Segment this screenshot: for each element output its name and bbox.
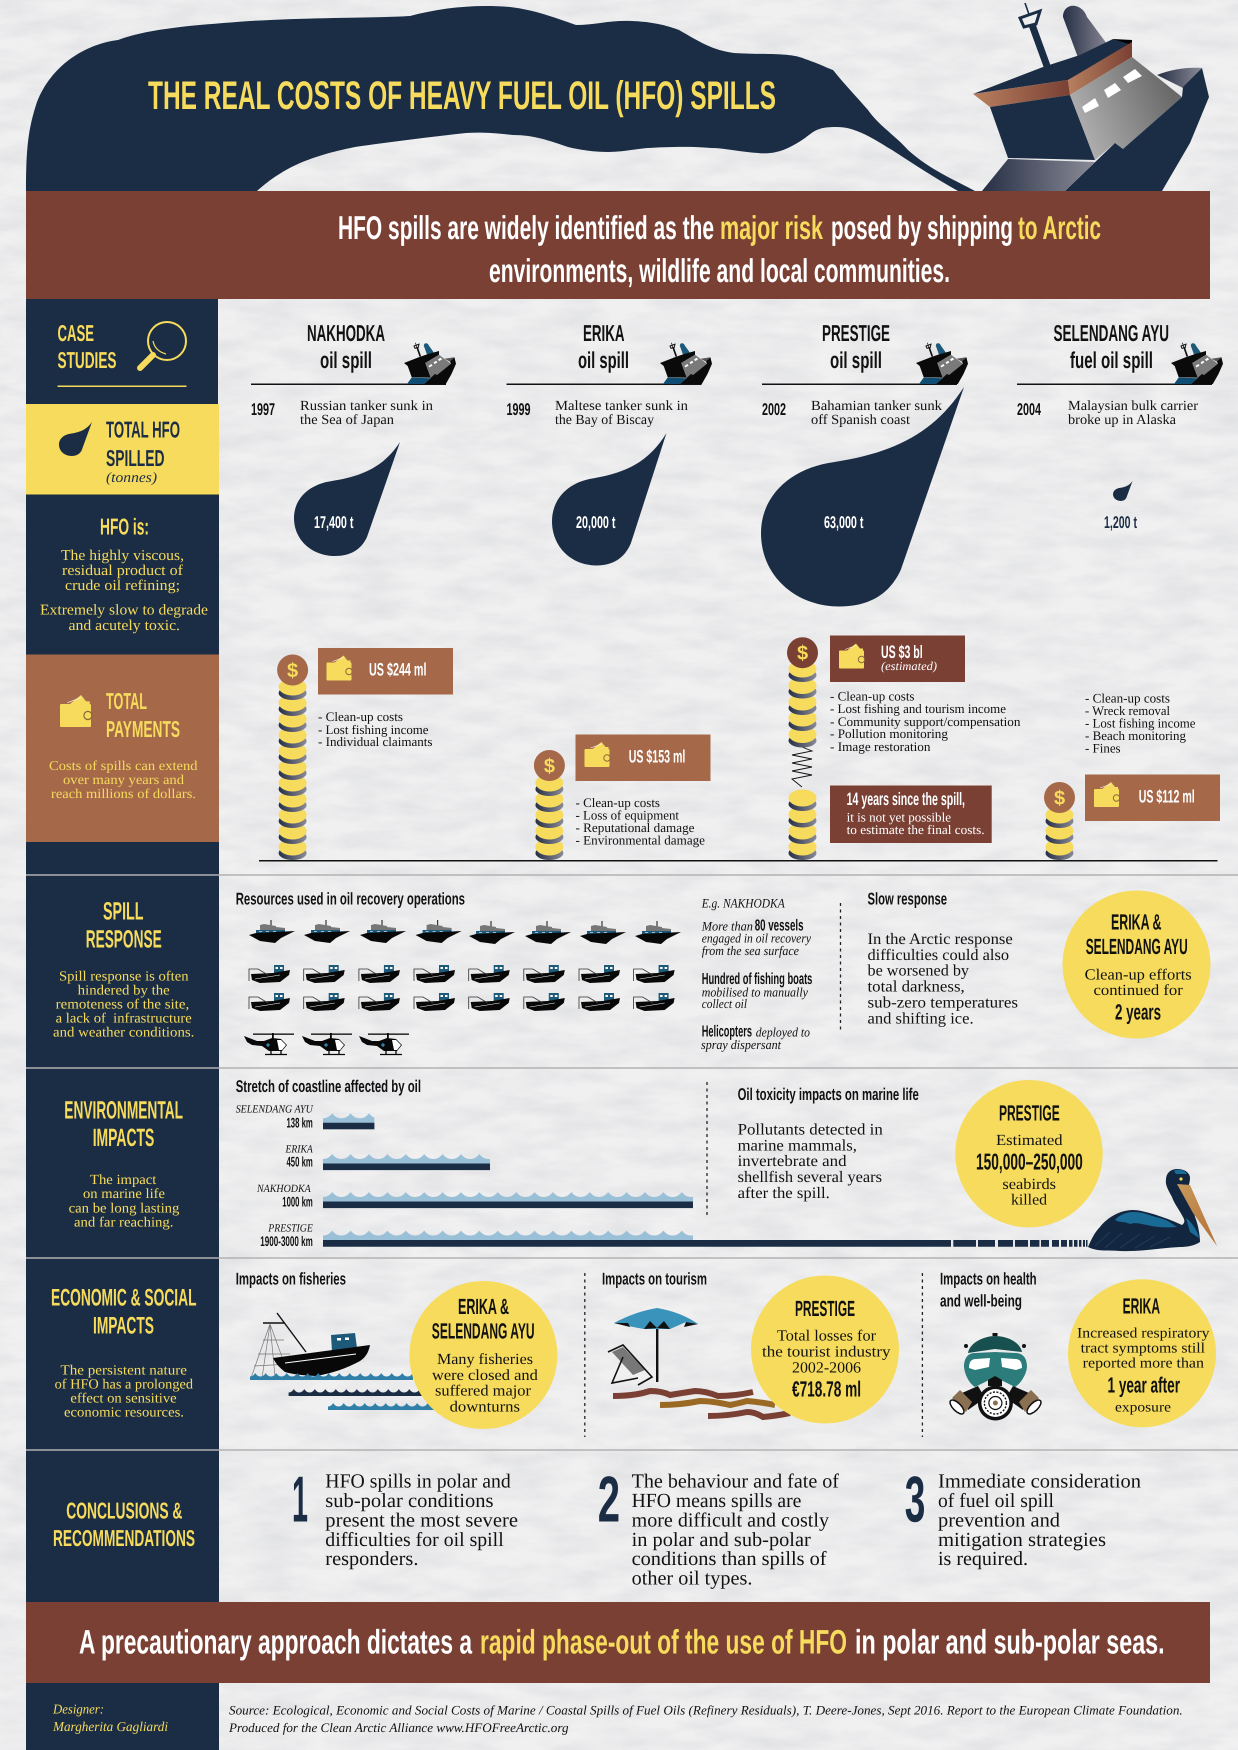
row: Nakhodka: 1000 km xyxy=(282,1193,313,1209)
note: on marine life xyxy=(83,1187,165,1202)
note: Costs of spills can extend xyxy=(49,758,198,773)
coin stack: Erika: $ xyxy=(544,756,555,778)
note: The persistent nature xyxy=(60,1363,187,1378)
icon: wallet xyxy=(326,656,352,680)
cost list: - Clean-up costs xyxy=(318,709,403,724)
description: Maltese tanker sunk in xyxy=(555,399,688,414)
conclusion 2: 2 xyxy=(598,1463,620,1536)
heading: CASE xyxy=(58,320,94,346)
callout: fisheries: Many fisheries xyxy=(437,1351,533,1368)
callout: Prestige seabirds xyxy=(955,1080,1103,1227)
name: PRESTIGE xyxy=(822,320,890,346)
callout: health: reported more than xyxy=(1083,1356,1205,1372)
callout: health: 1 year after xyxy=(1108,1373,1180,1398)
conclusion 2: HFO means spills are xyxy=(632,1490,802,1512)
waves: oil on beach xyxy=(613,1391,790,1417)
text: oil toxicity: Pollutants detected in xyxy=(738,1121,883,1138)
section: economic and social impacts sidebar xyxy=(26,1258,219,1450)
icon: magnifier xyxy=(140,322,186,368)
icon: wallet xyxy=(839,644,865,668)
note: reach millions of dollars. xyxy=(51,786,196,801)
note: and weather conditions. xyxy=(53,1026,194,1041)
headline text: posed by shipping xyxy=(831,209,1013,246)
section: spill response sidebar xyxy=(26,875,219,1068)
amount: US $153 ml xyxy=(629,746,685,766)
year: 2004 xyxy=(1017,400,1041,419)
headline band xyxy=(26,191,1210,299)
value: 1,200 t xyxy=(1104,513,1137,532)
conclusion 1: responders. xyxy=(325,1548,418,1570)
cost list: - Clean-up costs xyxy=(576,795,660,810)
icon: wallet xyxy=(60,695,92,727)
sidebar: spacer xyxy=(26,842,219,875)
heading xyxy=(53,1497,195,1551)
name xyxy=(1054,320,1169,373)
sidebar: total HFO spilled xyxy=(26,404,219,494)
note xyxy=(69,1173,179,1230)
label: (tonnes) xyxy=(106,470,157,486)
name xyxy=(307,320,385,373)
icon: ship xyxy=(1171,343,1223,384)
note: a lack of infrastructure xyxy=(56,1012,192,1027)
heading: ECONOMIC & SOCIAL xyxy=(51,1285,196,1312)
heading: SPILL xyxy=(103,897,144,925)
row: Nakhodka: NAKHODKA xyxy=(256,1183,311,1195)
callout: Prestige seabirds: 150,000–250,000 xyxy=(976,1148,1083,1174)
text: Nakhodka resources: spray dispersant xyxy=(701,1037,781,1052)
coin stack: Prestige xyxy=(787,637,818,860)
callout: fisheries: were closed and xyxy=(432,1367,538,1384)
column: Nakhodka xyxy=(251,320,456,556)
section: conclusions sidebar xyxy=(26,1450,219,1603)
callout: tourism xyxy=(751,1276,899,1424)
callout: tourism: €718.78 ml xyxy=(792,1377,861,1402)
row: Erika xyxy=(285,1144,490,1170)
description: the Bay of Biscay xyxy=(555,413,654,428)
coin stack: Nakhodka xyxy=(277,654,308,860)
row: Nakhodka xyxy=(256,1183,693,1209)
column: Prestige xyxy=(761,320,968,606)
conclusion 2: conditions than spills of xyxy=(632,1548,827,1570)
cost list: - Wreck removal xyxy=(1085,703,1170,718)
year: 1997 xyxy=(251,400,275,419)
cost list: - Individual claimants xyxy=(318,734,432,749)
conclusion 1: sub-polar conditions xyxy=(325,1490,494,1512)
heading: PAYMENTS xyxy=(106,716,180,742)
note: over many years and xyxy=(63,772,184,787)
heading xyxy=(106,688,180,742)
heading: CONCLUSIONS & xyxy=(66,1497,182,1523)
text: Nakhodka resources xyxy=(701,896,812,1052)
label: TOTAL HFO xyxy=(106,416,180,442)
chart heading: Stretch of coastline affected by oil xyxy=(236,1077,421,1096)
conclusion 1: 1 xyxy=(292,1463,308,1536)
name xyxy=(822,320,890,373)
designer credit xyxy=(26,1683,219,1750)
drop: 20,000 t xyxy=(552,433,666,565)
conclusion 1: HFO spills in polar and xyxy=(325,1471,511,1493)
icon: ship xyxy=(916,343,968,384)
conclusion 3: Immediate consideration xyxy=(938,1471,1141,1493)
designer credit: Margherita Gagliardi xyxy=(52,1719,168,1734)
name: NAKHODKA xyxy=(307,320,385,346)
cost list: - Lost fishing and tourism income xyxy=(830,701,1006,716)
text: slow response: and shifting ice. xyxy=(868,1010,974,1027)
cost list: - Fines xyxy=(1085,741,1121,756)
text: slow response: sub-zero temperatures xyxy=(868,994,1018,1011)
source note: Produced for the Clean Arctic Alliance www.HFOFreeArctic.org xyxy=(228,1720,569,1735)
callout: fisheries: SELENDANG AYU xyxy=(432,1318,535,1343)
value: 20,000 t xyxy=(576,513,616,532)
estimated note: (estimated) xyxy=(881,659,937,673)
note: can be long lasting xyxy=(69,1201,179,1216)
icon: sinking ship xyxy=(973,3,1209,191)
note: of HFO has a prolonged xyxy=(55,1378,193,1393)
definition: residual product of xyxy=(62,563,183,579)
conclusion 3: of fuel oil spill xyxy=(938,1490,1054,1512)
cost list: - Image restoration xyxy=(830,739,931,754)
icon: wallet xyxy=(584,742,610,767)
name xyxy=(578,320,629,373)
name: oil spill xyxy=(830,347,882,373)
heading: STUDIES xyxy=(58,347,116,373)
source note: Source: Ecological, Economic and Social Costs of Marine / Coastal Spills of Fuel Oils (Refinery Residuals), T. Deere-Jones, Sept 2016. Report to the European Climate Foundation. xyxy=(229,1702,1183,1717)
callout: health: ERIKA xyxy=(1123,1293,1160,1318)
conclusion 2 xyxy=(598,1463,839,1589)
column: Selendang Ayu xyxy=(1017,320,1223,532)
heading: tourism: Impacts on tourism xyxy=(602,1270,707,1289)
headline text: major risk xyxy=(720,209,823,246)
heading: TOTAL xyxy=(106,688,147,714)
callout: Erika and Selendang Ayu clean-up: Clean-up efforts xyxy=(1085,966,1192,983)
closing statement: A precautionary approach dictates a xyxy=(79,1623,473,1661)
conclusion 3: mitigation strategies xyxy=(938,1529,1106,1551)
icon rows: fishing boats xyxy=(249,965,675,1011)
text: slow response: In the Arctic response xyxy=(868,931,1013,948)
sidebar: case studies xyxy=(26,299,218,404)
conclusion 1: present the most severe xyxy=(325,1510,518,1532)
cost list: - Lost fishing income xyxy=(318,722,429,737)
name: oil spill xyxy=(320,347,372,373)
definition: Extremely slow to degrade xyxy=(40,602,208,618)
closing statement: rapid phase-out of the use of HFO xyxy=(480,1623,847,1661)
heading xyxy=(51,1285,196,1339)
description xyxy=(1068,399,1198,428)
amount: US $112 ml xyxy=(1139,786,1195,806)
conclusion 2: The behaviour and fate of xyxy=(632,1471,839,1493)
callout: health: tract symptoms still xyxy=(1081,1341,1205,1357)
note: The impact xyxy=(90,1173,157,1188)
sidebar: total payments xyxy=(26,654,219,842)
note: economic resources. xyxy=(64,1406,184,1421)
callout: tourism: the tourist industry xyxy=(762,1344,891,1361)
label xyxy=(106,416,180,486)
cost list: - Lost fishing income xyxy=(1085,716,1196,731)
description xyxy=(300,399,433,428)
heading: RECOMMENDATIONS xyxy=(53,1525,195,1551)
payment: Nakhodka xyxy=(318,648,453,749)
text: oil toxicity: after the spill. xyxy=(738,1185,830,1202)
callout: Prestige seabirds: seabirds xyxy=(1002,1176,1056,1193)
sidebar: HFO is xyxy=(26,494,219,654)
amount: US $3 bl xyxy=(881,642,923,662)
heading: RESPONSE xyxy=(86,926,162,954)
payment: Selendang Ayu xyxy=(1085,690,1220,821)
text: Nakhodka resources: mobilised to manually xyxy=(702,985,808,1000)
conclusion 1: difficulties for oil spill xyxy=(325,1529,504,1551)
value: 17,400 t xyxy=(314,513,354,532)
cost list: - Clean-up costs xyxy=(830,689,914,704)
name: oil spill xyxy=(578,347,629,373)
note xyxy=(53,969,194,1041)
cost list xyxy=(1085,690,1196,756)
title: THE REAL COSTS OF HEAVY FUEL OIL (HFO) SPILLS xyxy=(148,74,776,118)
column: Erika xyxy=(506,320,712,565)
oil slick banner shape xyxy=(26,6,975,191)
row: Prestige: 1900-3000 km xyxy=(260,1233,313,1249)
cost list: - Clean-up costs xyxy=(1085,690,1170,706)
conclusion 3 xyxy=(905,1463,1141,1570)
heading: ENVIRONMENTAL xyxy=(64,1096,183,1124)
payments baseline xyxy=(259,860,1218,862)
callout: 14 years since the spill: to estimate the final costs. xyxy=(847,822,985,837)
row: Prestige: PRESTIGE xyxy=(267,1223,313,1235)
row: Selendang Ayu: 138 km xyxy=(286,1114,313,1130)
definition: The highly viscous, xyxy=(61,548,184,564)
icon: wallet xyxy=(1094,782,1120,807)
drop: 1,200 t xyxy=(1113,481,1133,501)
text: Nakhodka resources: collect oil xyxy=(702,996,747,1011)
description: Bahamian tanker sunk xyxy=(811,399,942,414)
coin stack: Selendang Ayu xyxy=(1044,782,1075,860)
heading: IMPACTS xyxy=(93,1312,154,1339)
text: slow response xyxy=(868,890,1018,1027)
coin stack: Erika xyxy=(534,750,565,860)
source note xyxy=(228,1702,1183,1735)
callout: 14 years since the spill xyxy=(830,786,992,843)
text: slow response: be worsened by xyxy=(868,963,969,980)
cost list: - Loss of equipment xyxy=(576,808,679,822)
description: the Sea of Japan xyxy=(300,413,394,428)
conclusion 2: other oil types. xyxy=(632,1567,752,1589)
icon: drop xyxy=(59,422,92,456)
description: Malaysian bulk carrier xyxy=(1068,399,1198,414)
designer credit: Designer: xyxy=(52,1701,104,1716)
definition: crude oil refining; xyxy=(65,578,180,594)
headline text: to Arctic xyxy=(1018,209,1101,246)
note xyxy=(55,1363,193,1421)
callout: Erika and Selendang Ayu clean-up: continued for xyxy=(1094,982,1184,999)
text: oil toxicity xyxy=(738,1085,919,1202)
payment: Prestige xyxy=(830,636,1021,754)
definition xyxy=(40,548,208,634)
icon: ship xyxy=(404,343,456,384)
text: oil toxicity: shellfish several years xyxy=(738,1169,882,1186)
cost list: - Beach monitoring xyxy=(1085,728,1186,743)
row: Selendang Ayu xyxy=(236,1104,374,1130)
label: SPILLED xyxy=(106,445,164,471)
icon: fishing boat xyxy=(251,1313,370,1378)
cost list xyxy=(318,709,432,749)
closing statement xyxy=(79,1623,1165,1661)
drop: 63,000 t xyxy=(761,387,964,606)
text: Nakhodka resources: engaged in oil recovery xyxy=(702,931,811,946)
heading: resources: Resources used in oil recovery operations xyxy=(236,890,465,909)
note: Spill response is often xyxy=(59,969,188,984)
amount: US $244 ml xyxy=(369,660,426,680)
callout: fisheries xyxy=(409,1281,557,1429)
icon: ship xyxy=(660,343,712,384)
text: oil toxicity: marine mammals, xyxy=(738,1137,857,1154)
note: effect on sensitive xyxy=(70,1392,177,1407)
description: off Spanish coast xyxy=(811,413,910,428)
year: 2002 xyxy=(762,400,786,419)
text: Nakhodka resources: Helicopters xyxy=(702,1024,752,1041)
callout: health: exposure xyxy=(1115,1401,1171,1416)
section: environmental impacts sidebar xyxy=(26,1068,219,1258)
description: Russian tanker sunk in xyxy=(300,399,433,414)
coin stack: Selendang Ayu: $ xyxy=(1054,788,1065,810)
heading xyxy=(86,897,162,954)
icon row: vessels xyxy=(249,920,681,944)
heading: fisheries: Impacts on fisheries xyxy=(236,1270,346,1289)
year: 1999 xyxy=(506,400,530,419)
callout: health xyxy=(1068,1279,1216,1427)
cost list xyxy=(576,795,705,848)
coin stack: Prestige: $ xyxy=(797,643,808,665)
icon: oiled pelican xyxy=(1088,1169,1217,1251)
heading: health: Impacts on health xyxy=(940,1270,1037,1289)
drop: 17,400 t xyxy=(294,442,400,556)
icon: gas mask xyxy=(948,1333,1043,1420)
callout: fisheries: suffered major xyxy=(435,1383,532,1400)
conclusion 3: 3 xyxy=(905,1463,925,1536)
row: Erika: ERIKA xyxy=(285,1144,313,1156)
text: Nakhodka resources: E.g. NAKHODKA xyxy=(701,896,785,911)
heading xyxy=(58,320,116,373)
text: oil toxicity: Oil toxicity impacts on marine life xyxy=(738,1085,919,1104)
cost list: - Reputational damage xyxy=(576,820,695,835)
row: Erika: 450 km xyxy=(286,1154,313,1170)
icon row: helicopters xyxy=(244,1033,409,1054)
row: Prestige xyxy=(260,1223,1088,1249)
conclusion 2: more difficult and costly xyxy=(632,1510,829,1532)
payment: Erika xyxy=(576,734,710,848)
heading: HFO is: xyxy=(100,514,149,540)
row: Selendang Ayu: SELENDANG AYU xyxy=(236,1104,314,1116)
callout: health: Increased respiratory xyxy=(1077,1325,1210,1341)
callout: Erika and Selendang Ayu clean-up: 2 years xyxy=(1115,999,1161,1024)
icon: beach umbrella and chair xyxy=(608,1308,698,1385)
callout: Erika and Selendang Ayu clean-up xyxy=(1062,890,1210,1038)
definition: and acutely toxic. xyxy=(68,618,180,634)
value: 63,000 t xyxy=(824,513,864,532)
text: slow response: Slow response xyxy=(868,890,947,909)
name: fuel oil spill xyxy=(1070,347,1153,373)
note: and far reaching. xyxy=(74,1215,174,1230)
callout: Prestige seabirds: killed xyxy=(1011,1192,1047,1209)
text: Nakhodka resources: deployed to xyxy=(756,1025,810,1040)
cost list xyxy=(830,689,1021,754)
callout: fisheries: ERIKA & xyxy=(458,1294,509,1319)
text: Nakhodka resources: Hundred of fishing boats xyxy=(702,971,812,988)
callout: tourism: PRESTIGE xyxy=(795,1296,855,1321)
text: Nakhodka resources: 80 vessels xyxy=(755,918,804,935)
coin stack: Nakhodka: $ xyxy=(287,660,298,682)
callout: Erika and Selendang Ayu clean-up: ERIKA & xyxy=(1111,909,1162,934)
callout: Prestige seabirds: PRESTIGE xyxy=(999,1101,1060,1126)
note: remoteness of the site, xyxy=(56,998,189,1013)
callout: Prestige seabirds: Estimated xyxy=(996,1132,1063,1149)
text: slow response: total darkness, xyxy=(868,979,965,996)
bar chart: coastline affected xyxy=(236,1104,1087,1249)
description xyxy=(555,399,688,428)
name: ERIKA xyxy=(583,320,624,346)
conclusion 2: in polar and sub-polar xyxy=(632,1529,811,1551)
callout: 14 years since the spill: 14 years since the spill, xyxy=(847,789,965,809)
callout: fisheries: downturns xyxy=(450,1399,520,1416)
headline text: HFO spills are widely identified as the xyxy=(338,209,714,246)
callout: tourism: Total losses for xyxy=(777,1328,877,1345)
heading: health xyxy=(940,1270,1037,1311)
cost list: - Community support/compensation xyxy=(830,714,1021,729)
conclusion 1 xyxy=(292,1463,518,1570)
heading: health: and well-being xyxy=(940,1292,1022,1311)
callout: 14 years since the spill: it is not yet possible xyxy=(847,810,951,824)
text: Nakhodka resources: from the sea surface xyxy=(702,943,799,958)
text: oil toxicity: invertebrate and xyxy=(738,1153,846,1170)
description xyxy=(811,399,942,428)
conclusion 3: prevention and xyxy=(938,1510,1060,1532)
text: Nakhodka resources: More than xyxy=(701,919,753,934)
cost list: - Environmental damage xyxy=(576,832,705,848)
heading: IMPACTS xyxy=(93,1124,154,1152)
text: slow response: difficulties could also xyxy=(868,947,1009,964)
conclusion 3: is required. xyxy=(938,1548,1028,1570)
headline text xyxy=(338,209,1101,289)
description: broke up in Alaska xyxy=(1068,413,1177,428)
callout: tourism: 2002-2006 xyxy=(792,1359,861,1376)
note: hindered by the xyxy=(78,983,170,998)
headline text: environments, wildlife and local communities. xyxy=(489,252,950,289)
heading xyxy=(64,1096,183,1152)
note xyxy=(49,758,198,801)
cost list: - Pollution monitoring xyxy=(830,726,948,741)
waves xyxy=(250,1373,435,1410)
closing band xyxy=(26,1602,1210,1683)
